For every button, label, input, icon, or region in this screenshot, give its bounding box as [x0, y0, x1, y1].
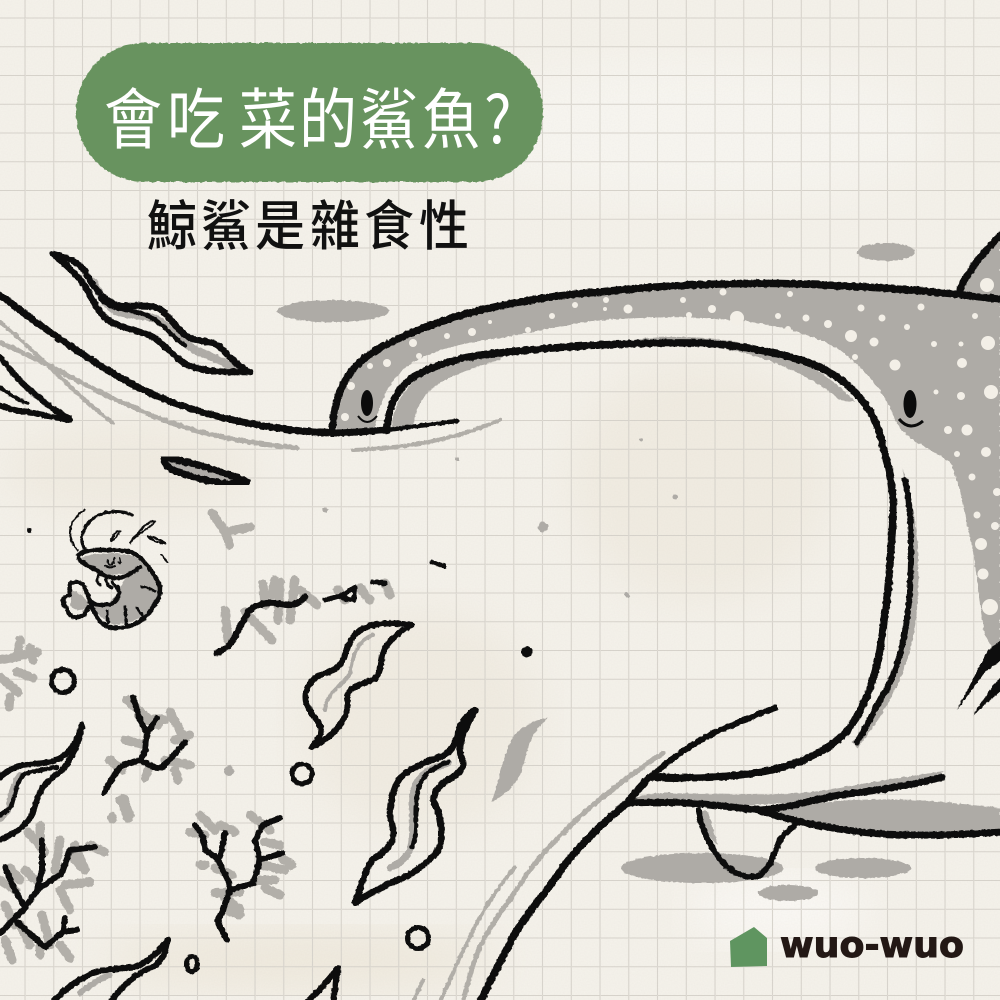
coral group: grey shadows: [0, 513, 390, 960]
seaweed: top: [53, 254, 250, 372]
grey shadow ovals: [277, 243, 915, 901]
shark spots: [341, 278, 1000, 615]
shrimp: [63, 510, 167, 628]
seaweed: middle: [306, 623, 412, 747]
shark body fill: [337, 237, 1000, 845]
bubbles and dots: [26, 438, 678, 972]
seaweed: bottom left: [53, 940, 338, 1000]
seaweed: lower center: [355, 710, 475, 903]
logo house icon: [730, 927, 767, 967]
grey seaweed trace lines bottom: [413, 753, 663, 1000]
logo: wuo-wuo: [730, 925, 964, 967]
whale shark: [332, 234, 1000, 1000]
mouth line and left body lines: [0, 295, 500, 450]
logo wordmark: wuo-wuo: [780, 925, 964, 966]
title pill: [76, 43, 543, 182]
coral group: black branches: [0, 562, 444, 947]
subtitle: 鯨鯊是雜食性: [147, 183, 469, 261]
shark outline strokes: [332, 234, 1000, 1000]
shark eyes: [358, 390, 923, 426]
seaweed: left: [0, 725, 82, 840]
seaweed: small oval: [164, 458, 247, 483]
title text: 會吃菜的鯊魚?: [104, 66, 511, 162]
